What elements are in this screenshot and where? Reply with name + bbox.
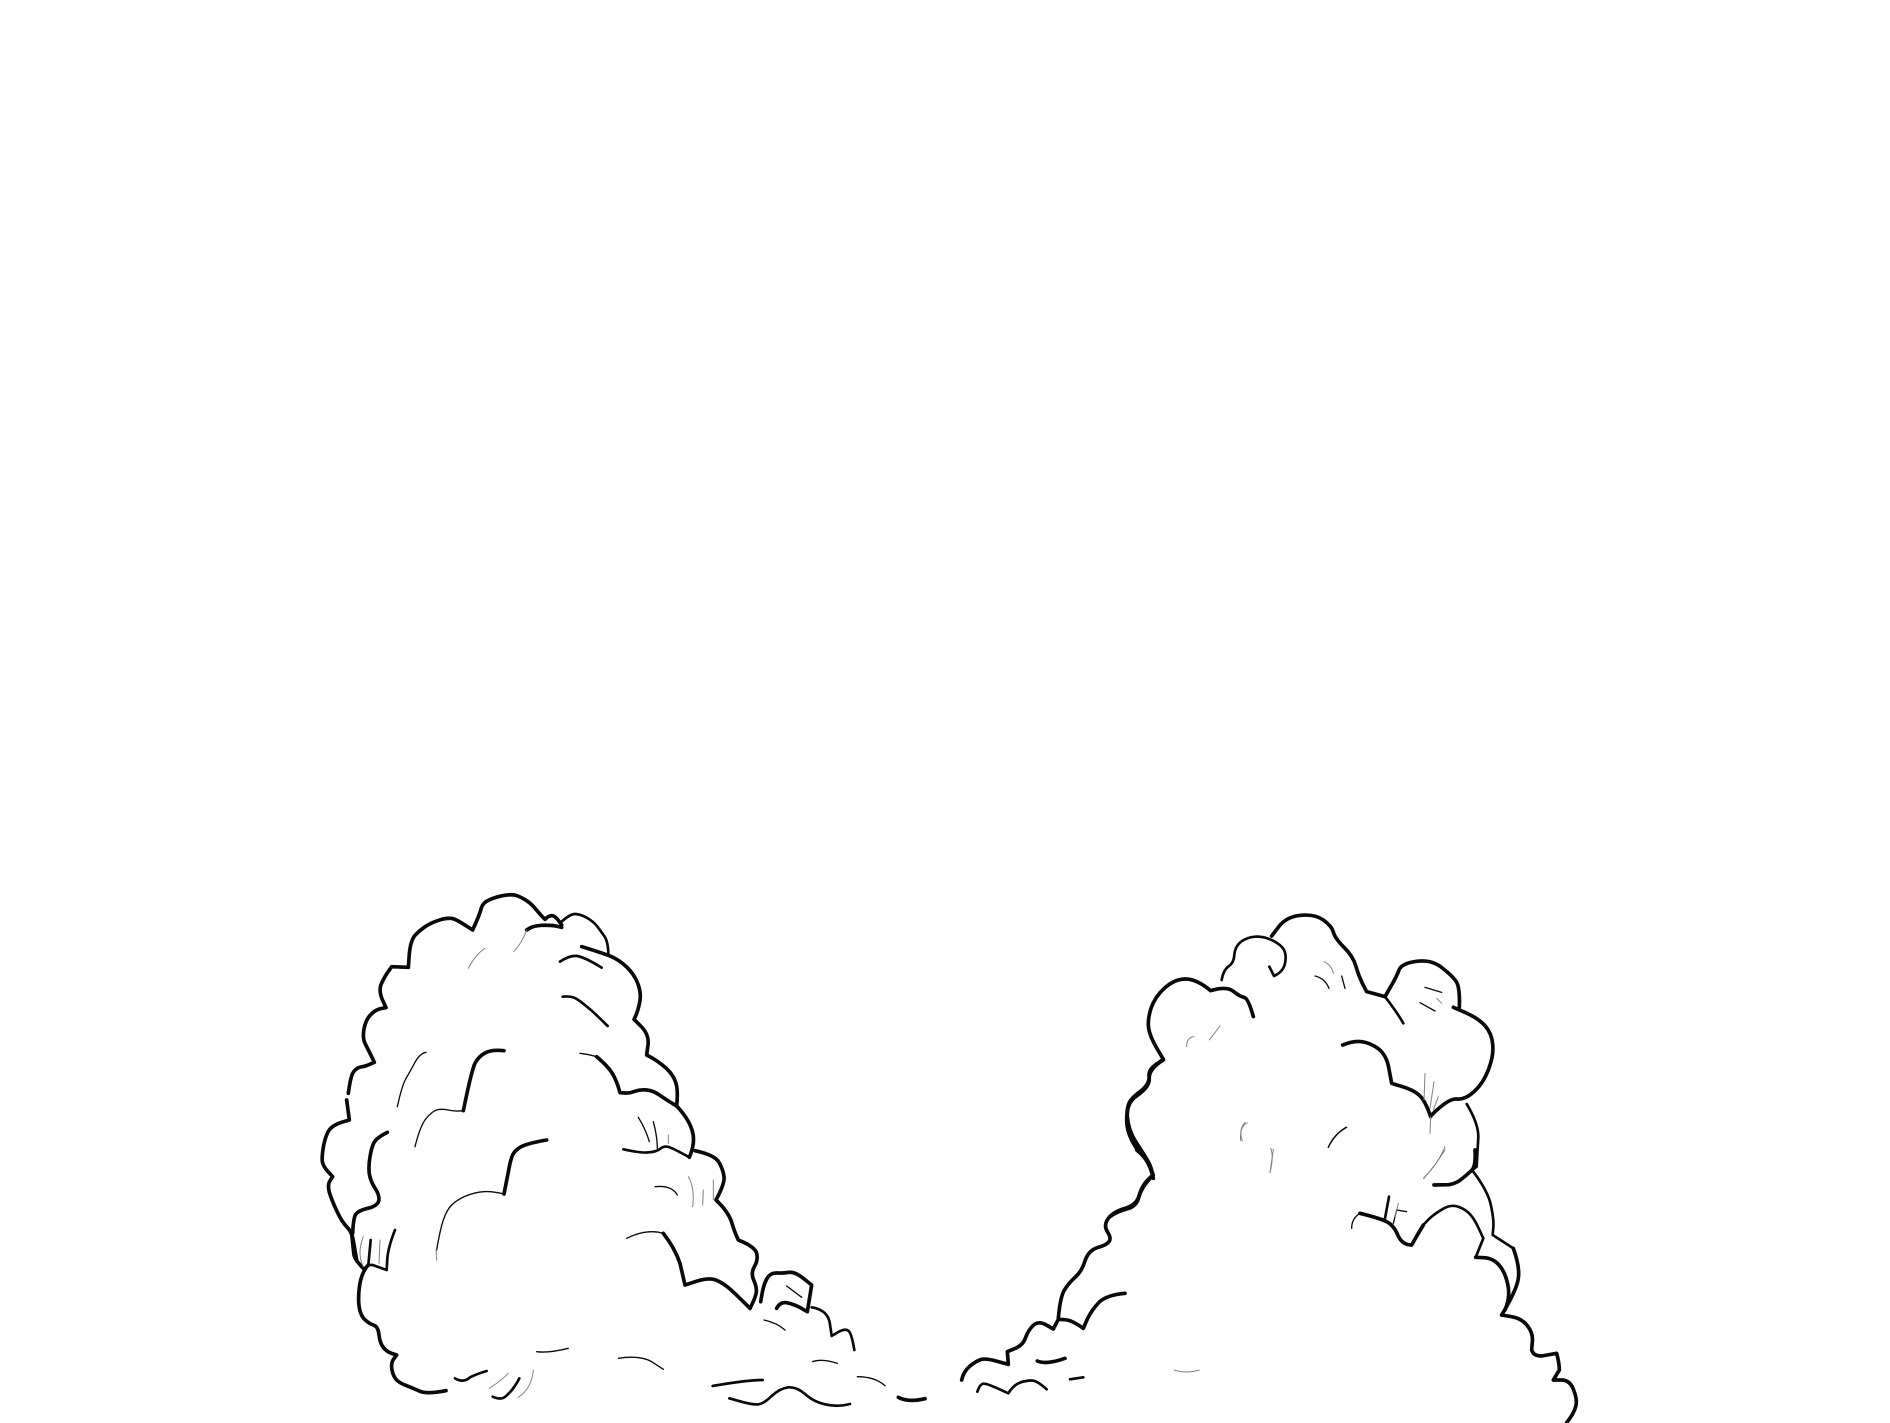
left cloud lower outline and details xyxy=(352,1230,568,1399)
right cloud lower left edge xyxy=(962,1150,1199,1393)
left cloud mid outline xyxy=(322,1100,547,1260)
left cloud right shoulder xyxy=(560,914,693,1157)
cloud: left xyxy=(322,895,925,1406)
right cloud right edge xyxy=(1352,1150,1576,1423)
left cloud trailing puffs xyxy=(618,1151,925,1406)
right cloud top outline xyxy=(1127,915,1493,1180)
left cloud upper outline xyxy=(348,895,562,1147)
cloud: right xyxy=(962,915,1576,1423)
right cloud left edge xyxy=(1110,1060,1346,1217)
